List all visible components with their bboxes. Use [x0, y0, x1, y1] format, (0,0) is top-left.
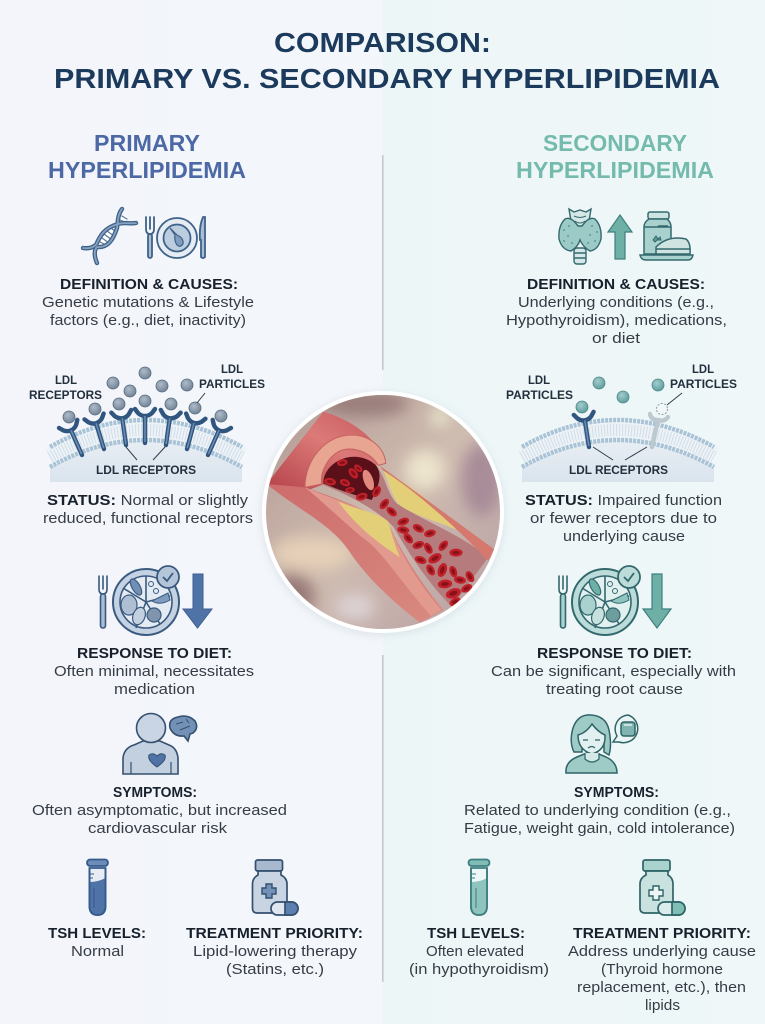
text: response to diet — [54, 646, 254, 698]
text: symptoms: SYMPTOMS: — [574, 785, 659, 801]
text: treatment priority: Lipid-lowering therapy — [193, 944, 358, 960]
heading: primary: PRIMARY — [94, 130, 200, 156]
icon: dna helix — [83, 209, 136, 263]
LDL particles — [576, 377, 668, 414]
central divider upper — [382, 155, 384, 370]
diagram labels: LDL — [692, 364, 714, 376]
icon: test tube — [468, 860, 490, 915]
central divider lower — [382, 655, 384, 982]
text: symptoms: Related to underlying condition (e.g., — [464, 803, 731, 819]
diagram labels: LDL RECEPTORS — [569, 465, 668, 477]
text: symptoms — [32, 785, 287, 837]
lumen — [323, 457, 488, 607]
text: response to diet: RESPONSE TO DIET: — [537, 646, 692, 662]
text: response to diet: medication — [114, 682, 195, 698]
diagram labels: LDL — [221, 364, 243, 376]
heading: secondary: SECONDARY — [543, 130, 687, 156]
text: treatment priority: replacement, etc.), then — [577, 980, 746, 996]
panel: secondary hyperlipidemia — [409, 130, 756, 1014]
text: status — [525, 493, 722, 545]
text: definition and causes: or diet — [592, 331, 640, 347]
text: definition and causes — [506, 277, 727, 347]
icon: thyroid gland — [559, 209, 601, 264]
text: definition and causes — [42, 277, 254, 329]
title — [54, 27, 720, 94]
text: status: reduced, functional receptors — [43, 511, 253, 527]
text: treatment priority: Address underlying cause — [568, 944, 756, 960]
heading: primary — [48, 130, 246, 183]
icon: test tube — [87, 860, 108, 915]
leader lines — [126, 393, 205, 460]
diagram labels: LDL — [55, 375, 77, 387]
text: TSH levels — [409, 926, 549, 978]
icon: plate with fork and knife — [146, 217, 205, 258]
lower wall — [267, 484, 443, 623]
background: right half — [383, 0, 765, 1024]
leader lines — [593, 393, 682, 460]
text: treatment priority: TREATMENT PRIORITY: — [573, 926, 751, 942]
text: TSH levels — [48, 926, 146, 960]
heading: secondary — [516, 130, 714, 183]
text: response to diet: Often minimal, necessitates — [54, 664, 254, 680]
diagram labels: LDL — [528, 375, 550, 387]
background: left half — [0, 0, 383, 1024]
lower wall cut face — [305, 487, 442, 616]
text: TSH levels: TSH LEVELS: — [427, 926, 525, 942]
text: status: or fewer receptors due to — [530, 511, 717, 527]
heading: secondary: HYPERLIPIDEMIA — [516, 157, 714, 183]
text: symptoms: Often asymptomatic, but increased — [32, 803, 287, 819]
text: status: underlying cause — [563, 529, 685, 545]
text: definition and causes: DEFINITION & CAUSES: — [527, 277, 705, 293]
receptors — [59, 409, 231, 459]
illustration: artery with plaque — [260, 390, 506, 636]
text: status: STATUS: Impaired function — [525, 493, 722, 509]
text: TSH levels: TSH LEVELS: — [48, 926, 146, 942]
text: treatment priority — [186, 926, 363, 978]
text: treatment priority: (Thyroid hormone — [601, 962, 723, 978]
text: status — [43, 493, 253, 527]
diagram labels: PARTICLES — [199, 379, 265, 391]
text: symptoms — [464, 785, 735, 837]
text: symptoms: SYMPTOMS: — [113, 785, 197, 801]
text: definition and causes: Genetic mutations & Lifestyle — [42, 295, 254, 311]
text: symptoms: Fatigue, weight gain, cold intolerance) — [464, 821, 735, 837]
diagram labels — [506, 364, 737, 477]
text: treatment priority: TREATMENT PRIORITY: — [186, 926, 363, 942]
diagram: normal LDL receptors — [29, 364, 265, 482]
text: definition and causes: Hypothyroidism), medications, — [506, 313, 727, 329]
text: TSH levels: (in hypothyroidism) — [409, 962, 549, 978]
text: symptoms: cardiovascular risk — [88, 821, 228, 837]
diagram labels: LDL RECEPTORS — [96, 465, 196, 477]
text: definition and causes: factors (e.g., diet, inactivity) — [50, 313, 246, 329]
icon: jar and cake — [640, 212, 693, 260]
icon: diet plate with down arrow — [99, 566, 212, 635]
text: status: STATUS: Normal or slightly — [47, 493, 249, 509]
red blood cells — [323, 458, 476, 608]
diagram labels — [29, 364, 265, 477]
text: definition and causes: Underlying conditions (e.g., — [518, 295, 714, 311]
icon: up arrow — [608, 215, 632, 259]
text: TSH levels: Often elevated — [426, 944, 524, 960]
diagram labels: RECEPTORS — [29, 390, 102, 402]
panel: primary hyperlipidemia — [29, 130, 363, 978]
text: treatment priority: lipids — [645, 998, 680, 1014]
icon: tired woman with scale bubble — [566, 715, 638, 773]
opening rim — [305, 435, 386, 487]
receptors — [574, 412, 668, 449]
text: TSH levels: Normal — [71, 944, 124, 960]
icon: person with brain and heart — [123, 714, 197, 774]
text: response to diet: treating root cause — [546, 682, 683, 698]
upper wall — [379, 465, 494, 561]
text: response to diet — [491, 646, 736, 698]
diagram labels: PARTICLES — [670, 379, 737, 391]
artery back tube — [267, 412, 386, 490]
icon: medicine bottle with pill — [640, 860, 685, 915]
icon: medicine bottle with pill — [252, 860, 298, 915]
text: response to diet: RESPONSE TO DIET: — [77, 646, 232, 662]
plaque — [383, 471, 462, 532]
diagram labels: PARTICLES — [506, 390, 573, 402]
text: definition and causes: DEFINITION & CAUSES: — [60, 277, 238, 293]
icon: diet plate with down arrow — [559, 566, 671, 635]
LDL particles — [63, 367, 227, 423]
title: PRIMARY VS. SECONDARY HYPERLIPIDEMIA — [54, 63, 720, 94]
text: response to diet: Can be significant, especially with — [491, 664, 736, 680]
heading: primary: HYPERLIPIDEMIA — [48, 157, 246, 183]
text: treatment priority: (Statins, etc.) — [226, 962, 324, 978]
diagram: impaired LDL receptors — [506, 364, 737, 482]
text: treatment priority — [568, 926, 756, 1014]
title: COMPARISON: — [274, 27, 491, 58]
